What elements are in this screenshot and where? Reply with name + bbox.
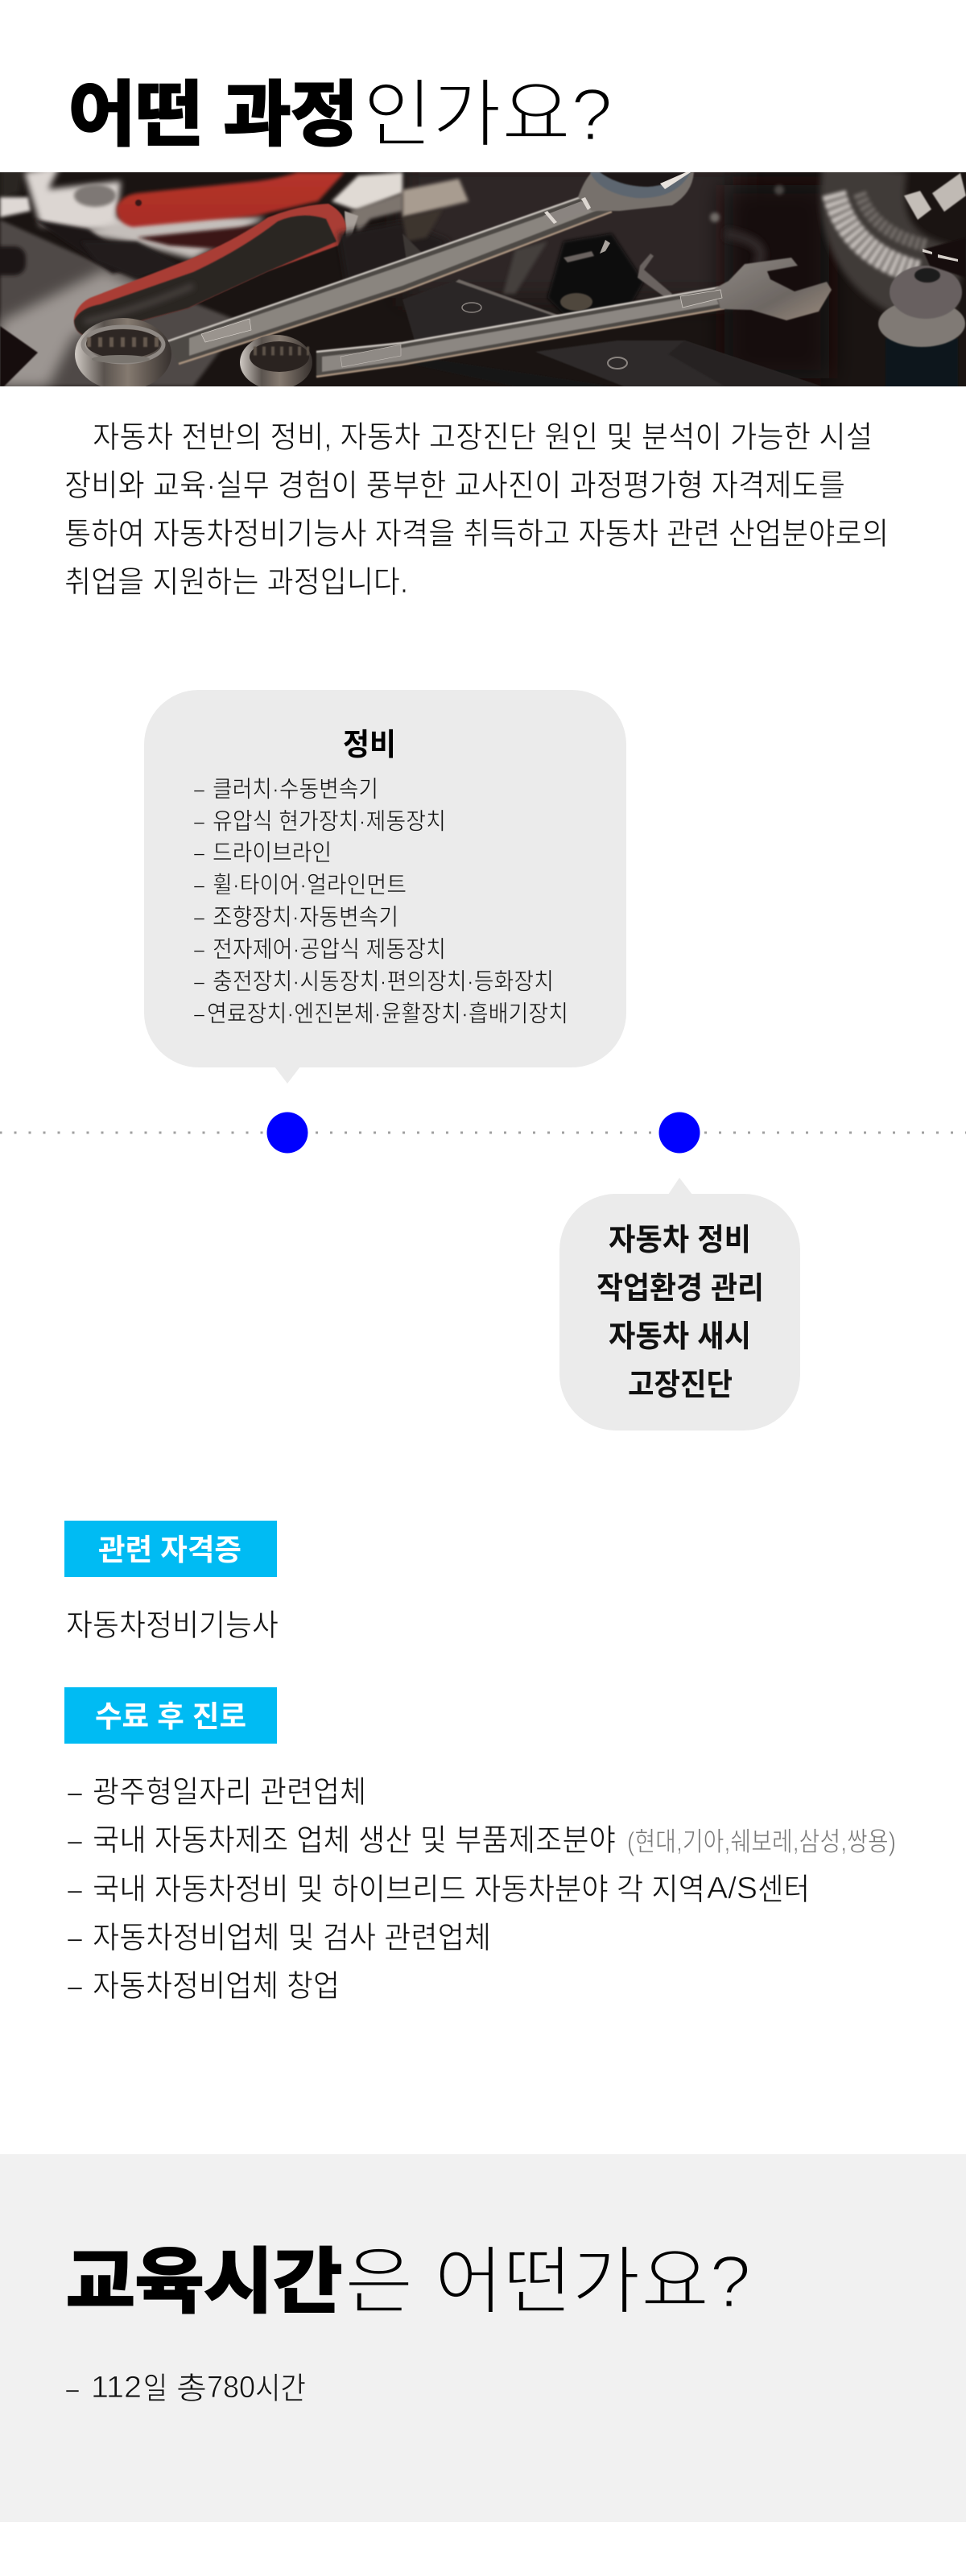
bubble heading: 정비: 정비 — [343, 729, 396, 762]
list: career paths: – — [68, 1873, 83, 1907]
text: duration: 시간 — [255, 2372, 306, 2406]
panel: 정비 speech bubble — [144, 690, 626, 1084]
list: career paths: (현대,기아,쉐보레,삼성,쌍용) — [627, 1827, 896, 1856]
bubble list: maintenance topics: – — [194, 809, 205, 835]
list: career paths: – — [68, 1824, 83, 1858]
hose — [863, 165, 958, 290]
title: 어떤 과정인가요?: 인가요? — [363, 74, 613, 156]
pliers — [137, 225, 258, 250]
bubble list: maintenance topics: 드라이브라인 — [213, 840, 332, 866]
list: career paths: – — [68, 1776, 83, 1810]
bubble text: job duties: 작업환경 관리 — [597, 1272, 764, 1306]
bubble list: maintenance topics: – — [194, 777, 205, 803]
photo: wrenches and pliers in an engine bay — [0, 161, 966, 394]
badge: 관련 자격증 — [64, 1521, 277, 1577]
bubble text: job duties: 자동차 정비 — [609, 1224, 751, 1257]
wrench 2 — [316, 287, 724, 377]
list: career paths: – — [68, 1922, 83, 1955]
bubble list: maintenance topics — [194, 777, 568, 1027]
bubble text: job duties: 자동차 새시 — [609, 1320, 751, 1354]
list: career paths: 센터 — [758, 1873, 810, 1907]
knob — [886, 338, 958, 386]
panel: right speech bubble — [559, 1178, 800, 1430]
bubble list: maintenance topics: 클러치·수동변속기 — [213, 777, 378, 803]
list: career paths — [68, 1776, 896, 2004]
bubble text: job duties: 고장진단 — [628, 1368, 733, 1402]
lower plates — [402, 291, 551, 340]
timeline marker: left blue dot — [267, 1113, 308, 1153]
body text: course description: 취업을 지원하는 과정입니다. — [64, 566, 408, 600]
text: duration: 780 — [207, 2371, 255, 2405]
left tray — [0, 220, 242, 386]
bubble list: maintenance topics: 연료장치·엔진본체·윤활장치·흡배기장치 — [207, 1001, 568, 1027]
bubble list: maintenance topics: – — [194, 969, 205, 995]
badge: 수료 후 진로: 수료 후 진로 — [95, 1700, 246, 1733]
text: duration: 총 — [176, 2372, 207, 2406]
title: 어떤 과정인가요? — [68, 74, 613, 156]
heading: 교육시간은 어떤가요? — [66, 2241, 751, 2323]
background clutter — [334, 224, 446, 277]
text: duration: 일 — [143, 2372, 167, 2406]
list: career paths: 국내 자동차정비 및 하이브리드 자동차분야 각 지역 — [93, 1873, 705, 1907]
badge: 관련 자격증: 관련 자격증 — [98, 1534, 242, 1567]
heading: 교육시간은 어떤가요?: 교육시간 — [66, 2242, 342, 2322]
bubble list: maintenance topics: – — [194, 937, 205, 963]
body text: course description: 장비와 교육·실무 경험이 풍부한 교사진이 과정평가형 자격제도를 — [64, 469, 845, 503]
bubble list: maintenance topics: 유압식 현가장치·제동장치 — [213, 809, 446, 835]
bubble list: maintenance topics: 조향장치·자동변속기 — [213, 905, 398, 931]
heading: 교육시간은 어떤가요?: 은 어떤가요? — [345, 2241, 751, 2323]
list: career paths: 자동차정비업체 및 검사 관련업체 — [93, 1922, 491, 1955]
bubble list: maintenance topics: – — [194, 905, 205, 931]
title: 어떤 과정인가요?: 어떤 과정 — [68, 75, 358, 155]
timeline marker: right blue dot — [658, 1113, 700, 1153]
bubble list: maintenance topics: 충전장치·시동장치·편의장치·등화장치 — [213, 968, 554, 995]
text: certificate name: 자동차정비기능사 — [66, 1609, 279, 1643]
list: career paths: 국내 자동차제조 업체 생산 및 부품제조분야 — [93, 1824, 616, 1858]
text: duration: – — [66, 2372, 80, 2406]
panel: 교육시간 section — [0, 2154, 966, 2522]
badge: 수료 후 진로 — [64, 1687, 277, 1744]
wrench 1 — [219, 199, 610, 349]
bubble list: maintenance topics: 휠·타이어·얼라인먼트 — [213, 872, 407, 898]
bubble list: maintenance topics: – — [194, 840, 205, 866]
text: duration — [66, 2371, 306, 2406]
blurred light area — [20, 172, 126, 233]
list: career paths: A/S — [707, 1872, 758, 1905]
body text: course description: 자동차 전반의 정비, 자동차 고장진단 원인 및 분석이 가능한 시설 — [93, 421, 873, 455]
bubble list: maintenance topics: – — [194, 873, 205, 898]
bubble text: job duties — [597, 1224, 764, 1402]
bubble list: maintenance topics: 전자제어·공압식 제동장치 — [213, 937, 446, 963]
timeline: dotted line — [0, 1132, 966, 1133]
body text: course description: 통하여 자동차정비기능사 자격을 취득하고 자동차 관련 산업분야로의 — [64, 518, 889, 551]
bubble list: maintenance topics: – — [194, 1001, 205, 1027]
body text: course description — [64, 421, 889, 600]
list: career paths: 광주형일자리 관련업체 — [93, 1776, 366, 1810]
list: career paths: 자동차정비업체 창업 — [93, 1970, 340, 2004]
list: career paths: – — [68, 1970, 83, 2004]
text: duration: 112 — [91, 2371, 142, 2405]
